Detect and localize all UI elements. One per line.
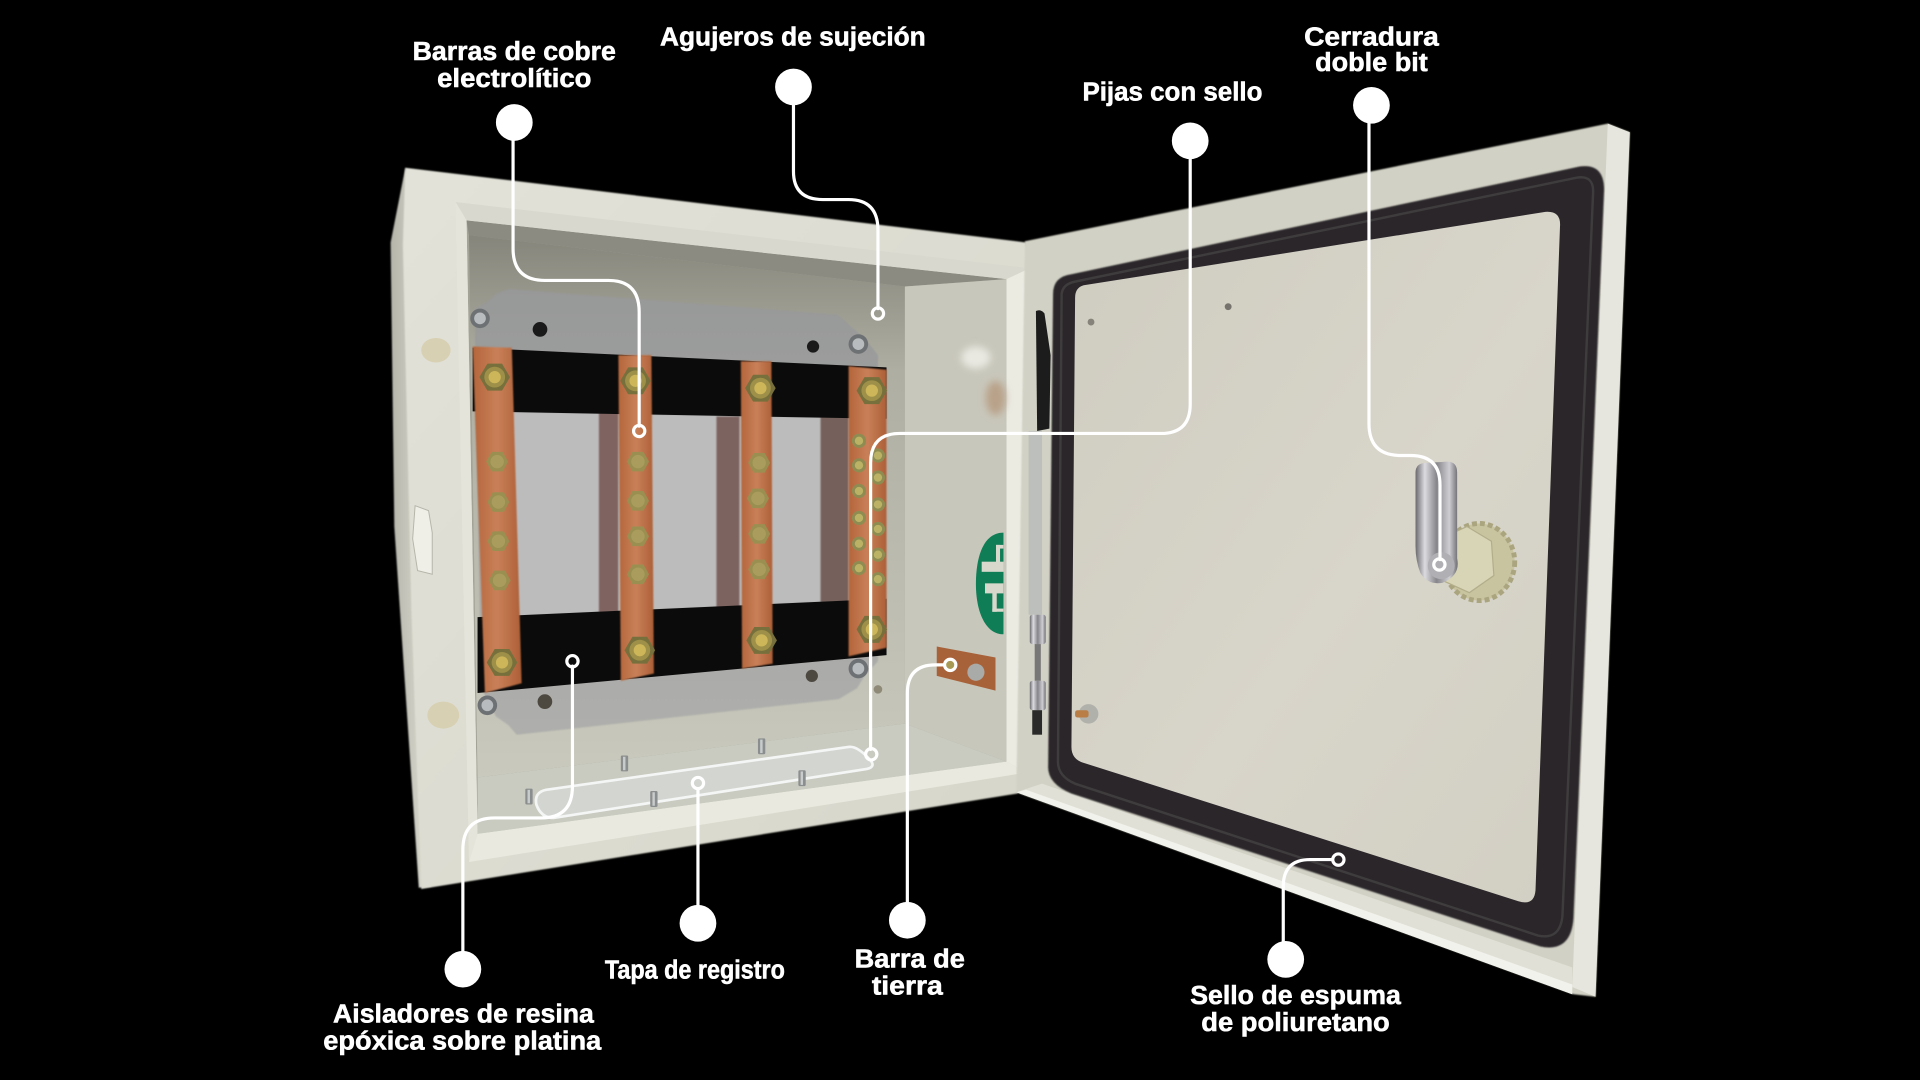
electrical enclosure body — [391, 168, 1030, 889]
callout: Aisladores de resina epóxica sobre platina: epóxica sobre platina — [323, 1025, 602, 1055]
callout: Tapa de registro — [605, 777, 785, 984]
callout: Tapa de registro: Tapa de registro — [605, 954, 785, 984]
grounding bar — [937, 647, 996, 691]
latch tab — [413, 506, 432, 574]
plate bolts — [470, 309, 868, 715]
callout: Pijas con sello — [866, 76, 1262, 760]
floor — [478, 724, 1007, 834]
double-bit lock — [1416, 462, 1515, 601]
frame plugs — [421, 338, 459, 729]
callout: Cerradura doble bit — [1304, 21, 1445, 570]
callout: Agujeros de sujeción: Agujeros de sujeción — [660, 21, 926, 51]
callout: Cerradura doble bit: doble bit — [1315, 47, 1428, 77]
callout: Barra de tierra — [855, 659, 965, 1000]
callout: Aisladores de resina epóxica sobre platina: Aisladores de resina — [333, 998, 594, 1028]
right lip — [1007, 268, 1030, 773]
rivets — [1088, 303, 1232, 325]
lock handle — [1416, 462, 1458, 583]
bottom lip — [469, 762, 1026, 862]
back wall — [469, 235, 905, 778]
left lip — [456, 202, 478, 862]
lower hinge — [1030, 615, 1046, 735]
lock knob — [1440, 523, 1515, 601]
seal highlight — [1058, 177, 1593, 936]
door earth bolt — [1075, 704, 1098, 724]
green logo — [976, 533, 1003, 634]
wall reflections — [961, 347, 1005, 415]
upper hinge — [1036, 310, 1051, 431]
copper bars — [473, 347, 887, 693]
translucent centre section — [490, 411, 887, 617]
callout: Sello de espuma de poliuretano: Sello de espuma — [1190, 980, 1401, 1010]
callout: Barra de tierra: Barra de — [855, 943, 965, 973]
callout: Agujeros de sujeción — [660, 21, 926, 319]
left side face — [391, 168, 431, 888]
right inner wall — [905, 279, 1007, 762]
door right edge — [1572, 124, 1630, 997]
hinge-side strip — [1029, 431, 1042, 615]
epoxy insulators — [473, 348, 887, 693]
mounting plate — [475, 289, 878, 735]
callout: Sello de espuma de poliuretano — [1190, 854, 1401, 1037]
plate holes — [533, 322, 882, 709]
polyurethane foam seal — [1048, 166, 1604, 947]
door inner panel — [1071, 212, 1560, 902]
door bottom bright edge — [1016, 790, 1572, 994]
callout: Pijas con sello: Pijas con sello — [1082, 76, 1262, 106]
callout: Barras de cobre electrolítico — [413, 36, 645, 437]
callout: Sello de espuma de poliuretano: de poliuretano — [1201, 1007, 1390, 1037]
callout: Barras de cobre electrolítico: Barras de cobre — [413, 36, 616, 66]
top inner wall — [467, 220, 1007, 287]
callout: Barras de cobre electrolítico: electrolítico — [437, 63, 591, 93]
bolts on copper bars — [479, 364, 887, 676]
callout: Cerradura doble bit: Cerradura — [1304, 21, 1439, 51]
front frame — [403, 168, 1030, 889]
top lip — [456, 202, 1030, 279]
inspection cover on floor — [525, 738, 873, 818]
callout: Barra de tierra: tierra — [872, 970, 943, 1000]
hinged door — [1016, 124, 1630, 997]
callout: Aisladores de resina epóxica sobre platina — [323, 656, 602, 1055]
door tray — [1016, 124, 1630, 997]
door bottom lip — [1016, 784, 1572, 994]
inner opening — [467, 220, 1007, 834]
